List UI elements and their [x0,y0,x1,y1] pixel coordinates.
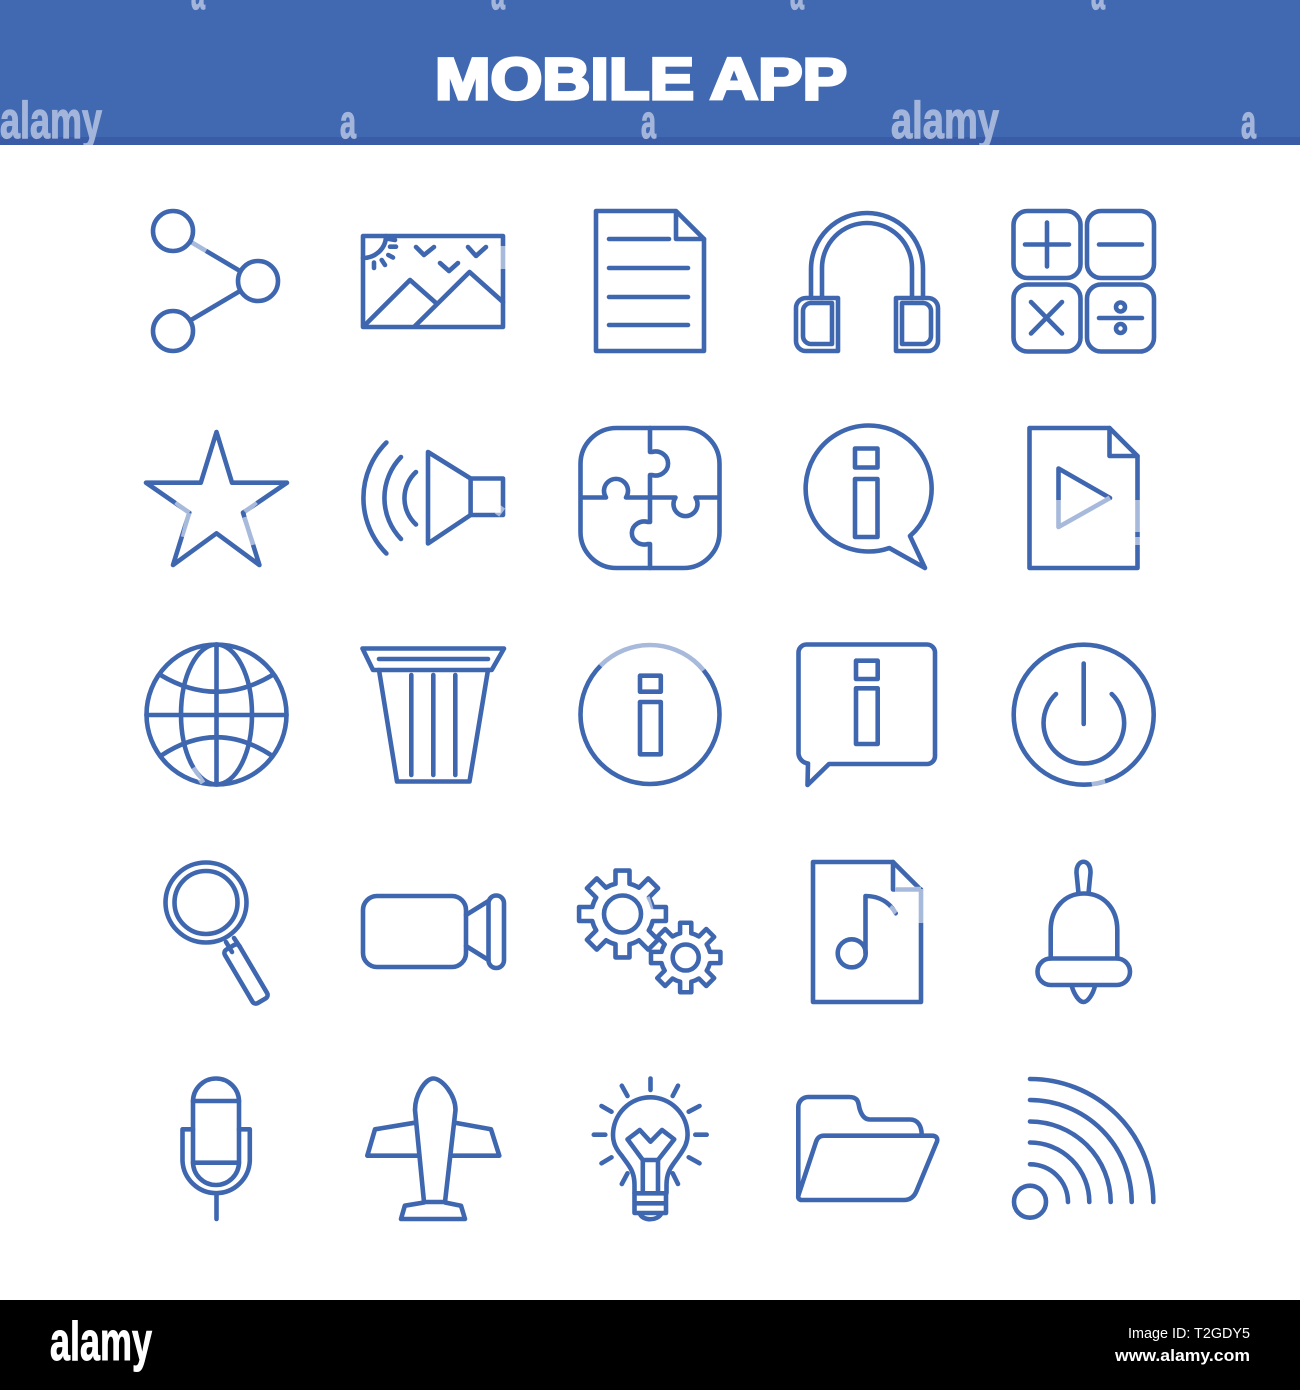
icon: document [596,211,704,351]
website: www.alamy.com [1114,1346,1250,1365]
icon: globe [146,644,286,784]
title: MOBILE APP [435,47,847,112]
watermarks on banner: a [641,95,656,148]
icon: trash bin [362,648,504,782]
icon: headphones [796,213,938,351]
icon: music file [813,862,921,1002]
icon: puzzle [580,428,720,568]
image id: Image ID: T2GDY5 [1128,1325,1250,1342]
footer logo: alamy [50,1310,152,1372]
icon: magnifier [166,862,269,1005]
icon: power button [1014,645,1154,785]
icon: video camera [363,896,504,968]
footer bar [0,1300,1300,1390]
watermarks on banner: a [1241,95,1256,148]
icon: speaker [363,442,503,554]
icon: video file [1030,428,1138,568]
small gear [651,923,720,992]
watermarks on banner: alamy [891,92,999,150]
watermarks on banner: alamy [0,92,102,150]
watermarks on banner: a [340,95,357,148]
icon: airplane [367,1078,499,1219]
large gear [579,871,666,957]
icon: gears [579,871,720,992]
icon: microphone [182,1078,250,1219]
watermarks on banner [0,0,1256,150]
icon: wifi signal [1014,1079,1153,1218]
icon: bell [1038,862,1130,1002]
header banner [0,0,1300,150]
icon: info speech bubble [806,425,932,568]
icon: landscape picture [363,236,503,327]
icon: star [146,432,287,565]
icon: light bulb [594,1078,707,1219]
icon: open folder [798,1097,937,1200]
faint watermark traces over icons [176,243,1138,923]
icon: calculator keys [1014,211,1154,352]
icon: share [153,211,278,351]
icon: info message box [798,644,935,785]
icon: info circle [580,645,720,784]
